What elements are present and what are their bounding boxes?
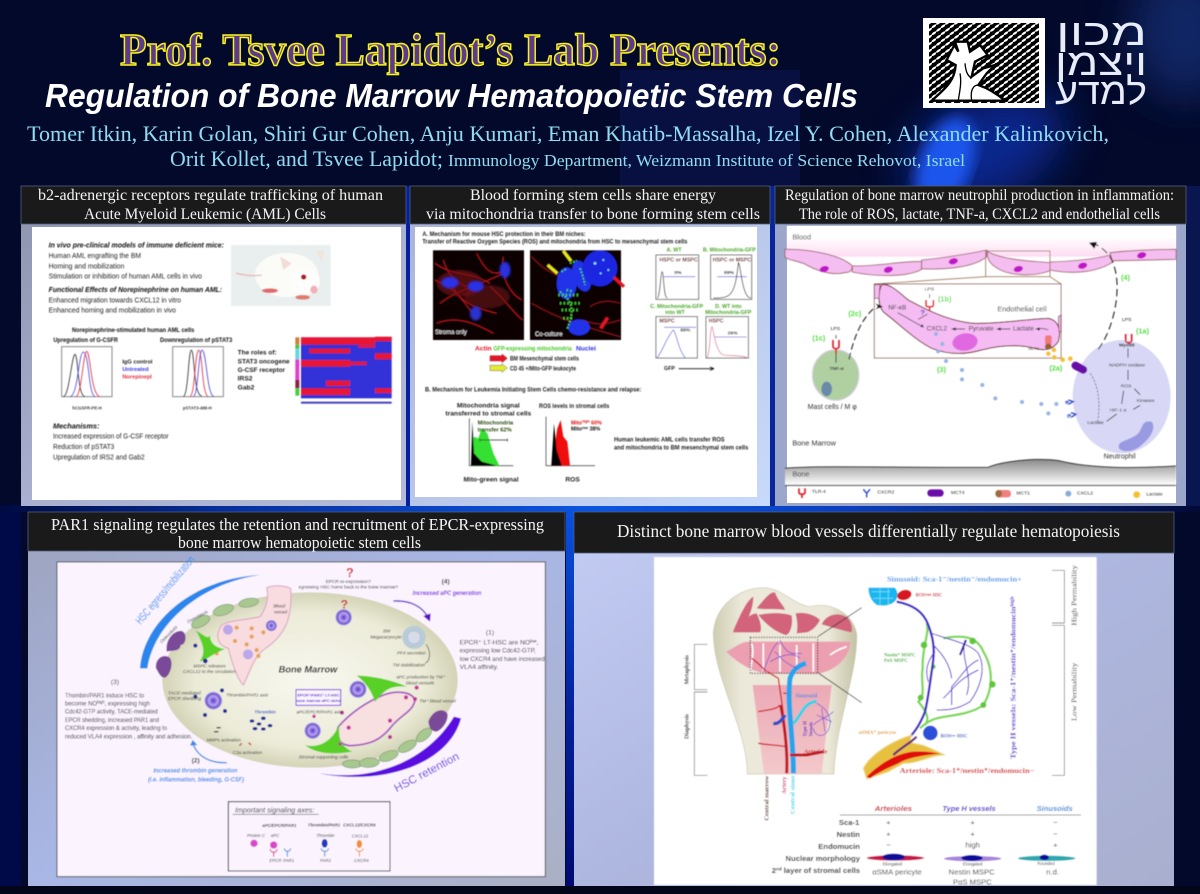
bone illustration xyxy=(684,588,862,821)
zoomed endothelial cell: Pyruvate xyxy=(969,325,994,332)
text block: mechanisms: Increased expression of G-CSF receptor xyxy=(53,432,169,441)
neutrophil: NADPH oxidase xyxy=(1109,363,1145,369)
text block: in vivo models: Human AML engrafting the BM xyxy=(49,251,141,260)
bone marrow ellipse xyxy=(162,592,458,768)
logo: Hebrew wordmark: מכון xyxy=(1056,12,1147,53)
text block: step 3: high xyxy=(97,700,105,705)
signaling axes box: aPC/EPCR/PAR1 xyxy=(262,823,297,828)
text block: step 1 xyxy=(460,629,545,671)
TM blood vessel niche: EPCR⁺/PAR1⁺ LT-HSC xyxy=(297,692,339,697)
endothelial layer xyxy=(785,249,1176,275)
vessel diagram: Arteriole: Sca-1⁺/nestin⁺/endomucin− xyxy=(900,766,1034,775)
arc: HSC egress xyxy=(134,554,260,668)
vessel diagram: High Permability xyxy=(1071,564,1079,626)
text block: step 3: Cdc42-GTP activity, TACE-mediated xyxy=(65,709,158,716)
comparison table: Sinusoids xyxy=(1037,804,1073,813)
text block: roles: G-CSF receptor xyxy=(238,367,285,374)
text block: in vivo models: Enhanced migration towards CXCL12 in vitro xyxy=(49,295,181,304)
micrograph: co-culture xyxy=(530,250,624,340)
micrograph legend: CD 45 +/Mito-GFP leukocyte xyxy=(510,366,577,372)
vessel diagram: low xyxy=(951,733,957,737)
authors xyxy=(27,121,1109,171)
HSC with thrombin: MMPs activation xyxy=(207,738,241,743)
logo: Hebrew wordmark xyxy=(1055,12,1147,112)
comparison table: + xyxy=(970,818,975,827)
comparison table: Elongated xyxy=(883,861,903,866)
histogram: mitochondria signal: Mitochondria xyxy=(478,420,514,426)
text block: in vivo models: Enhanced homing and mobilization in vivo xyxy=(49,305,176,314)
comparison table: Type H vessels xyxy=(942,804,996,813)
vessel diagram: HSC xyxy=(956,735,968,740)
flow plots A-D: GFP xyxy=(664,366,675,372)
histogram: ROS levels: 60% xyxy=(590,420,602,426)
histogram: ROS levels: high xyxy=(582,420,590,424)
legend: MCT1 xyxy=(1016,491,1030,497)
flow plots A-D: MSPC xyxy=(659,318,675,324)
bone illustration: Diaphysis xyxy=(684,713,690,739)
histogram: ROS levels: ROS levels in stromal cells xyxy=(539,403,610,410)
legend: CXCR2 xyxy=(877,489,894,495)
panel heading: bone marrow hematopoietic stem cells xyxy=(178,533,421,552)
lactate dots xyxy=(1046,348,1073,362)
panel heading xyxy=(51,515,544,552)
micrograph: stroma only: Stroma only xyxy=(435,330,467,336)
text block: in vivo models: Homing and mobilization xyxy=(49,261,124,270)
micrograph legend: Nuclei xyxy=(576,346,596,353)
panel heading: Distinct bone marrow blood vessels differentially regulate hematopoiesis xyxy=(617,521,1120,541)
text block: step 3: , expressing high xyxy=(105,701,150,708)
section A heading: Transfer of Reactive Oxygen Species (ROS) and mitochondria from HSC to mesenchymal stem cells xyxy=(422,239,688,246)
TM blood vessel niche: Stromal supporting cells xyxy=(299,755,349,760)
bone illustration: Artery xyxy=(782,777,788,794)
text block: roles: IRS2 xyxy=(238,376,253,383)
histogram: G-CSFR: hCGSFR-PE-H xyxy=(72,405,102,410)
histogram: mitochondria signal: Mito-green signal xyxy=(463,476,519,483)
label: blood: Blood xyxy=(792,232,811,241)
chart heading: Norepinephrine-stimulated human AML cells xyxy=(72,327,195,334)
zoomed endothelial cell xyxy=(874,251,1061,358)
legend: CXCL2 xyxy=(1077,491,1093,497)
recruitment question: egressing HSC home back to the bone marrow? xyxy=(299,585,398,590)
flow plots A-D: 26% xyxy=(728,330,738,336)
HSC with thrombin xyxy=(168,688,276,755)
authors: Orit Kollet, and Tsvee Lapidot; xyxy=(170,146,443,171)
flow plots A-D: 99% xyxy=(724,270,735,276)
step labels: (1a) xyxy=(1136,326,1150,335)
histogram: pSTAT3 xyxy=(173,347,223,410)
zoomed endothelial cell: Lactate xyxy=(1013,325,1034,332)
histogram: ROS levels xyxy=(539,403,610,483)
authors: Tomer Itkin, Karin Golan, Shiri Gur Cohen, Anju Kumari, Eman Khatib-Massalha, Izel Y. Cohen, Alexander Kalinkovich, xyxy=(27,121,1109,146)
legend: MCT4 xyxy=(951,490,965,496)
TM blood vessel niche: TM⁺ blood vessel xyxy=(419,699,457,704)
step 2: thrombin generation: (i.e. inflammation, bleeding, G-CSF) xyxy=(148,777,245,784)
megakaryocyte xyxy=(370,626,430,668)
comparison table: − xyxy=(1053,829,1058,838)
bone layer xyxy=(785,460,1176,485)
micrograph legend: BM Mesenchymal stem cells xyxy=(510,357,580,363)
step labels: (4) xyxy=(1121,273,1131,282)
text block: step 3: (3) xyxy=(111,679,119,686)
signaling axes box: Thrombin/PAR1 xyxy=(308,822,341,827)
comparison table: Nuclear morphology xyxy=(786,854,861,863)
bone illustration: Central sinus xyxy=(791,775,797,814)
histogram legend: IgG control xyxy=(122,360,153,366)
neutrophil xyxy=(1073,317,1171,461)
vessel diagram: ROS xyxy=(941,735,951,740)
text block: step 3: Thombin/PAR1 induce HSC to xyxy=(65,693,144,700)
panel heading: via mitochondria transfer to bone forming stem cells xyxy=(426,206,760,223)
panel content xyxy=(57,554,545,877)
text block: step 1: low CXCR4 and have increased xyxy=(460,656,545,663)
comparison table: layer of stromal cells xyxy=(782,866,860,875)
image: white mouse xyxy=(231,245,331,306)
recruitment question xyxy=(299,566,398,626)
comparison table: Endomucin xyxy=(818,842,860,851)
megakaryocyte: PF4 secretion xyxy=(397,651,426,656)
histogram: ROS levels: Mito xyxy=(571,420,582,426)
comparison table: − xyxy=(1053,818,1058,827)
mast cell: TNF-α xyxy=(829,366,845,372)
zoomed endothelial cell: NF-κB xyxy=(888,304,906,311)
flow plots A-D: A. WT xyxy=(666,247,682,253)
zoomed endothelial cell: ? xyxy=(920,308,925,317)
HSC with thrombin: Thrombin xyxy=(254,710,276,715)
flow plots A-D xyxy=(650,247,756,372)
aPC generation label: Increased aPC generation xyxy=(413,590,481,597)
step labels: (1b) xyxy=(938,295,952,304)
megakaryocyte: TM stabilization xyxy=(393,663,425,668)
arc: HSC egress: HSC egress/mobilization xyxy=(134,554,198,627)
subtitle: Regulation of Bone Marrow Hematopoietic Stem Cells xyxy=(45,77,858,114)
title: Prof. Tsvee Lapidot’s Lab Presents: xyxy=(120,25,781,75)
panel heading: b2-adrenergic receptors regulate trafficking of human xyxy=(38,187,383,204)
panel heading: PAR1 signaling regulates the retention and recruitment of EPCR-expressing xyxy=(51,515,544,534)
bone illustration: Type H xyxy=(804,721,809,737)
panel heading xyxy=(38,187,383,223)
comparison table: 2 xyxy=(772,866,776,875)
chart heading xyxy=(53,327,233,344)
zoomed endothelial cell: LPS xyxy=(925,287,935,293)
comparison table xyxy=(772,804,1081,886)
text block: step 3 xyxy=(65,679,192,740)
vessel diagram: Sinusoid: Sca-1⁻/nestin⁻/endomucin+ xyxy=(887,574,1022,583)
blood vessel top xyxy=(215,586,291,685)
text block: in vivo models: Functional Effects of Norepinephrine on human AML: xyxy=(49,285,223,294)
vessel diagram: PαS MSPC xyxy=(884,659,908,664)
HSC with thrombin: Thrombin/PAR1 axis xyxy=(226,692,269,697)
flow plots A-D: into WT xyxy=(665,310,686,316)
text block: roles: Gab2 xyxy=(238,384,255,391)
panel: mitochondria transfer xyxy=(410,186,770,506)
vessel diagram: Type H vessels: Sca-1⁺/nestin⁺/endomucin xyxy=(1008,627,1017,759)
labels: osteo cells xyxy=(159,609,209,644)
comparison table: high xyxy=(965,841,980,850)
histogram legend: Untreated xyxy=(122,367,149,373)
comparison table: nd xyxy=(776,867,782,872)
signaling axes box: Protein C xyxy=(247,833,266,838)
micrograph: stroma only xyxy=(433,250,524,340)
text block: step 1: , xyxy=(537,639,539,646)
text block: in vivo models: In vivo pre-clinical models of immune deficient mice: xyxy=(49,241,225,250)
histogram: ROS levels: low xyxy=(582,426,588,430)
text block: step 3: reduced VLA4 expression , affinity and adhesion. xyxy=(65,733,192,740)
text block: mechanisms: Upregulation of IRS2 and Gab2 xyxy=(53,452,145,461)
text block: leukemic AML: Human leukemic AML cells transfer ROS xyxy=(614,436,725,443)
signaling axes box: CXCL12 xyxy=(352,833,369,838)
flow plots A-D: HSPC or MSPC xyxy=(659,257,698,263)
panel content xyxy=(785,226,1176,498)
signaling axes box: Important signaling axes: xyxy=(235,805,314,814)
step labels: (1c) xyxy=(812,334,826,343)
TM blood vessel niche: aPC production by TM⁺ xyxy=(396,674,446,679)
panel: neutrophil production xyxy=(775,186,1186,506)
labels: osteo cells: Osteoclasts xyxy=(159,624,179,644)
zoomed endothelial cell: Endothelial cell xyxy=(997,304,1047,313)
step labels: (3) xyxy=(937,365,947,374)
histogram: ROS levels: Mito xyxy=(571,427,582,433)
histogram: pSTAT3: pSTAT3-488-H xyxy=(183,405,212,410)
comparison table: PαS MSPC xyxy=(953,877,992,886)
megakaryocyte: BM xyxy=(383,629,390,634)
zoomed endothelial cell: MCT1 xyxy=(1028,346,1040,351)
histogram: G-CSFR xyxy=(62,347,112,410)
text block: step 1: EPCR⁺ LT-HSC are NO xyxy=(460,639,530,646)
labels: osteo cells: Osteoblasts xyxy=(186,609,209,624)
stromal cell MSPC: MSPC releases xyxy=(193,663,226,668)
histogram: ROS levels: 38% xyxy=(588,427,600,433)
vessel diagram: ROS xyxy=(916,594,925,599)
comparison table: + xyxy=(886,818,891,827)
neutrophil: ROS xyxy=(1121,383,1132,389)
flow plots A-D: C. Mitochondria-GFP xyxy=(650,304,704,310)
bone illustration: Vessels xyxy=(810,722,815,737)
bone illustration: Sinusoid xyxy=(795,694,818,700)
signaling axes box: PAR1 xyxy=(283,858,295,863)
vessel diagram: HSC xyxy=(932,594,943,599)
text block: step 1: (1) xyxy=(486,629,494,636)
text block: mechanisms: Mechanisms: xyxy=(53,421,100,430)
vessel diagram: Nestin⁺ MSPC xyxy=(884,653,916,659)
panel content xyxy=(654,557,1097,886)
logo: Weizmann tree emblem xyxy=(923,18,1045,108)
aPC generation label: (4) xyxy=(442,578,450,585)
TM blood vessel niche: aPC/EPCR/PAR1 axis xyxy=(296,709,343,714)
flow plots A-D: D. WT into xyxy=(715,304,742,310)
signaling axes box: aPC xyxy=(271,833,280,838)
histogram: mitochondria signal: Mitochondria signal xyxy=(457,402,520,409)
vessel diagram: high xyxy=(925,592,932,596)
stromal cell MSPC xyxy=(183,630,236,674)
comparison table: Nestin xyxy=(837,830,860,839)
signaling axes box xyxy=(228,802,390,871)
comparison table: − xyxy=(886,841,891,850)
flow plots A-D: B. Mitochondria-GFP xyxy=(703,247,756,253)
HSC with thrombin: C3a activation xyxy=(233,750,263,755)
flow plots A-D: HSPC xyxy=(709,318,724,324)
HSC with thrombin: EPCR shedding xyxy=(168,696,202,701)
step 2: thrombin generation: Increased thrombin generation xyxy=(153,767,237,774)
flow plots A-D: HSPC or MSPC xyxy=(713,257,751,263)
megakaryocyte: Megacaryocyte xyxy=(370,634,402,639)
comparison table: Rounded xyxy=(1037,861,1055,866)
neutrophil: Lactate xyxy=(1087,420,1104,426)
comparison table: n.d. xyxy=(1046,868,1059,877)
text block: step 1: low xyxy=(530,638,537,643)
text block: roles xyxy=(238,350,290,391)
mast cell xyxy=(808,326,859,411)
osteoclast cells xyxy=(156,631,448,732)
heatmap xyxy=(295,337,392,404)
text block: step 3: CXCR4 expression & activity, leading to xyxy=(65,725,167,732)
recruitment question: EPCR re-expression? xyxy=(326,579,371,584)
flow plots A-D: 88% xyxy=(680,328,691,334)
comparison table: + xyxy=(1053,841,1058,850)
comparison table: Nestin MSPC xyxy=(949,868,995,877)
text block: step 1: expressing low Cdc42-GTP, xyxy=(460,648,536,655)
mast cell: LPS xyxy=(831,326,841,332)
zoomed endothelial cell: CXCL2 xyxy=(927,325,948,332)
stromal cell MSPC: CXCL12 to the circulation xyxy=(183,669,236,674)
vessel diagram xyxy=(859,564,1079,779)
comparison table: Arterioles xyxy=(874,804,912,813)
text block: step 3: become NO xyxy=(65,701,100,708)
histogram: ROS levels: ROS xyxy=(565,476,580,483)
text block: mechanisms xyxy=(53,421,169,461)
bone marrow label: Bone Marrow xyxy=(792,439,837,448)
histogram legend: Norepinepl xyxy=(122,375,152,381)
legend: Lactate xyxy=(1146,492,1163,498)
CXCL2 dots xyxy=(934,332,1071,418)
logo: Hebrew wordmark: ויצמן xyxy=(1055,42,1147,83)
bone marrow title: Bone Marrow xyxy=(279,665,338,675)
histogram: mitochondria signal xyxy=(445,402,532,483)
chart heading: Downregulation of pSTAT3 xyxy=(160,337,233,344)
section A heading: A. Mechanism for mouse HSC protection in their BM niches: xyxy=(422,231,586,238)
step labels xyxy=(812,273,1150,374)
text block: step 1: VLA4 affinity. xyxy=(460,664,498,671)
bone illustration: Metaphysis xyxy=(684,654,690,684)
TM blood vessel niche: blood vessels xyxy=(406,680,435,685)
histogram legend xyxy=(122,360,153,381)
step 2: thrombin generation: (2) xyxy=(192,758,200,765)
legend xyxy=(799,488,1163,498)
TM blood vessel niche xyxy=(296,674,457,760)
chart heading: Upregulation of G-CSFR xyxy=(53,337,118,344)
neutrophil: Kinases xyxy=(1137,398,1155,404)
panel content xyxy=(422,231,756,483)
signaling axes box: PAR1 xyxy=(320,858,332,863)
text block: roles: STAT3 oncogene xyxy=(238,359,290,366)
neutrophil: Myd88 xyxy=(1119,343,1135,349)
logo: Hebrew wordmark: למדע xyxy=(1055,71,1147,112)
signaling axes box: CXCL12/CXCR4 xyxy=(343,823,376,828)
bone illustration: Arteriole xyxy=(804,749,828,755)
arc: HSC retention xyxy=(319,717,461,795)
authors: Immunology Department, Weizmann Institute of Science Rehovot, Israel xyxy=(448,151,965,170)
text block: mechanisms: Reduction of pSTAT3 xyxy=(53,442,114,451)
vessel diagram: high xyxy=(1010,596,1015,607)
step 2: thrombin generation xyxy=(148,740,245,784)
panel heading xyxy=(426,187,760,223)
comparison table: + xyxy=(886,829,891,838)
panel heading: Blood forming stem cells share energy xyxy=(470,187,716,204)
signaling axes box: EPCR xyxy=(269,858,281,863)
comparison table: + xyxy=(970,829,975,838)
panel: AML trafficking xyxy=(21,186,406,506)
micrograph: co-culture: Co-culture xyxy=(535,332,563,338)
step labels: (2c) xyxy=(848,309,862,318)
HSC with thrombin: TACE-mediated xyxy=(168,690,201,695)
panel heading: Acute Myeloid Leukemic (AML) Cells xyxy=(84,206,326,223)
comparison table: αSMA pericyte xyxy=(872,868,922,877)
panel: blood vessels hematopoiesis xyxy=(574,512,1174,886)
vessel diagram: αSMA⁺ pericyte xyxy=(859,730,897,736)
bone illustration: Central marrow xyxy=(765,775,771,821)
vessel diagram: Low Permability xyxy=(1071,662,1079,721)
aPC generation label xyxy=(393,578,481,622)
CXCR2 receptors xyxy=(1066,400,1076,417)
panel: PAR1 signaling xyxy=(28,512,565,886)
text block: in vivo models xyxy=(49,241,225,314)
TM blood vessel niche: bone marrow aPC niche xyxy=(296,698,342,703)
recruitment question: ? xyxy=(341,597,348,611)
arrows: signalling routes xyxy=(849,244,1117,359)
text block: step 3: EPCR shedding, increased PAR1 and xyxy=(65,717,159,724)
text block: leukemic AML xyxy=(614,436,749,451)
text block: roles: The roles of: xyxy=(238,350,277,357)
section B heading: B. Mechanism for Leukemia Initiating Stem Cells chemo-resistance and relapse: xyxy=(425,386,641,393)
neutrophil: Neutrophil xyxy=(1104,454,1136,461)
blood vessel top: vessel xyxy=(274,610,288,615)
comparison table: Elongated xyxy=(963,861,983,866)
signaling axes box: CXCR4 xyxy=(354,858,369,863)
arc: HSC retention: HSC retention xyxy=(392,751,461,795)
recruitment question: ? xyxy=(346,566,354,580)
neutrophil: HIF-1 α xyxy=(1110,407,1127,413)
flow plots A-D: Mitochondria-GFP xyxy=(705,310,752,316)
comparison table: Sca-1 xyxy=(839,818,860,827)
micrograph legend: GFP-expressing mitochondria xyxy=(493,346,572,353)
panel heading xyxy=(785,187,1174,223)
panel heading: The role of ROS, lactate, TNF-a, CXCL2 and endothelial cells xyxy=(799,206,1160,223)
signaling axes box: Thrombin xyxy=(316,833,335,838)
mast cell: Mast cells / M φ xyxy=(808,404,857,411)
text block: in vivo models: Stimulation or inhibition of human AML cells in vivo xyxy=(49,272,202,281)
bone layer: Bone xyxy=(792,469,809,478)
histogram: mitochondria signal: transferred to stromal cells xyxy=(445,410,532,417)
MCT4 transporter xyxy=(1070,360,1089,375)
section A heading xyxy=(422,231,688,246)
micrograph legend xyxy=(475,346,596,372)
blood vessel top: Blood xyxy=(273,604,286,609)
osteoblast cells xyxy=(189,597,434,768)
histogram: mitochondria signal: transfer 62% xyxy=(478,427,512,433)
flow plots A-D: 0% xyxy=(674,270,682,276)
neutrophil: LPS xyxy=(1122,317,1132,323)
micrograph legend: Actin xyxy=(475,346,492,353)
legend: TLR-4 xyxy=(812,489,826,495)
panel content xyxy=(49,241,392,461)
text block: leukemic AML: and mitochondria to BM mesenchymal stem cells xyxy=(614,444,749,451)
step labels: (2a) xyxy=(1049,363,1063,372)
